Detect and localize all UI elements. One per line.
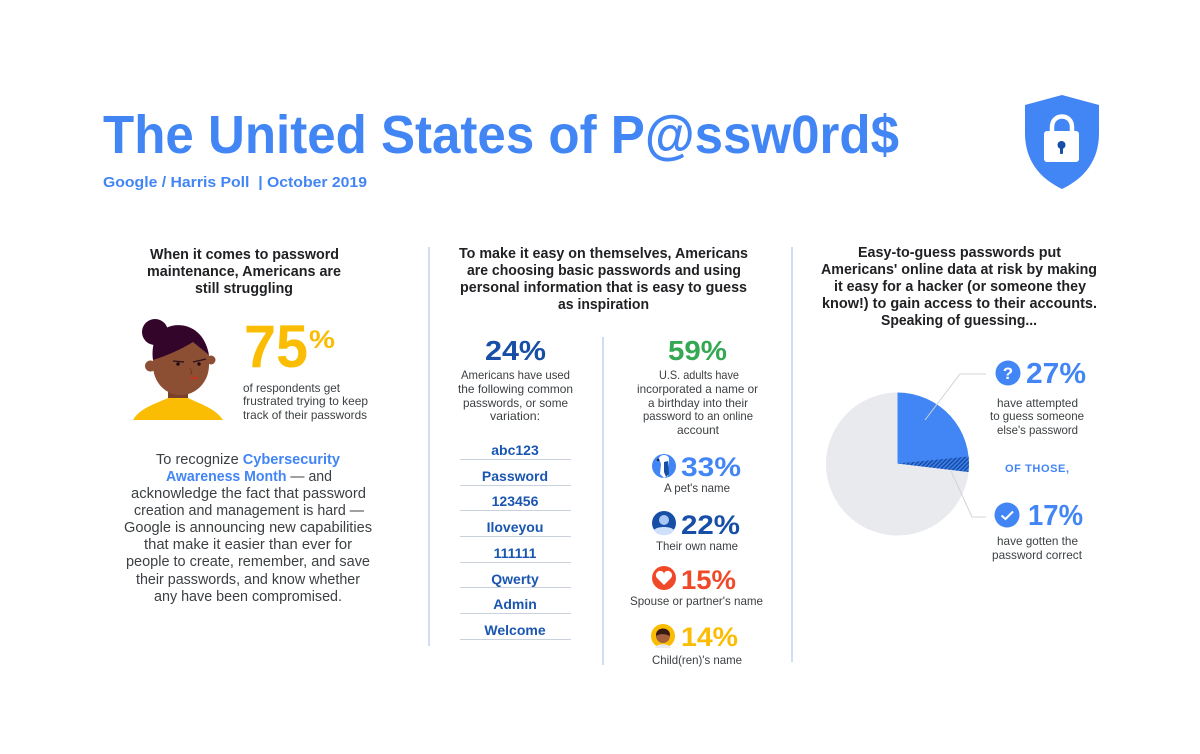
list: common passwords: Admin [493,596,537,612]
stat: own name 22 percent: 22% [681,510,740,540]
text: name or birthday: password to an online [643,409,753,423]
stat: 24 percent: 24% [485,335,546,366]
text: Cybersecurity Awareness Month paragraph: their passwords, and know whether [136,572,360,588]
stat: pet's name 33 percent: A pet's name [664,481,730,495]
callout line: to 27 percent [925,374,986,420]
list: common passwords: Password [482,468,548,484]
text: Cybersecurity Awareness Month paragraph: To recognize Cybersecurity [156,452,340,468]
list: common passwords [460,442,571,640]
text: Cybersecurity Awareness Month paragraph [124,452,372,605]
stat: 75 percent: 75 [244,313,308,380]
list: common passwords: Qwerty [491,571,539,587]
list: common passwords: Iloveyou [487,519,543,535]
heading: maintenance: When it comes to password [150,247,339,263]
heading: basic passwords: personal information that is easy to guess [460,280,747,296]
stat: 17 percent: 17% [1028,500,1083,532]
stat: partner's name 15 percent [630,565,763,608]
stat: pet's name 33 percent [652,452,741,495]
stat: children's name 14 percent [651,622,742,667]
icon: child [651,624,675,648]
text: common passwords intro: passwords, or some [463,396,568,410]
text: attempted to guess: to guess someone [990,409,1084,423]
stat: 27 percent: 27% [1026,358,1086,390]
heading: data at risk: it easy for a hacker (or someone they [834,279,1086,295]
text: attempted to guess: have attempted [997,396,1078,410]
stat: 59 percent: 59% [668,335,727,366]
callout line: to 17 percent [951,471,986,517]
text: gotten it correct: have gotten the [997,534,1078,548]
text: gotten it correct [992,534,1083,562]
text: gotten it correct: password correct [992,548,1083,562]
icon: person [652,511,676,535]
stat: children's name 14 percent: Child(ren)'s name [652,653,742,667]
heading: data at risk: Easy-to-guess passwords put [858,245,1061,261]
heading: basic passwords [459,246,748,313]
heading: data at risk: know!) to gain access to their accounts. [822,296,1097,312]
pie chart: 27 percent guessed, 17 percent correct [826,392,969,536]
stat: own name 22 percent [652,510,740,553]
panel: basic passwords [458,246,763,667]
text: common passwords intro [458,368,573,423]
stat: pet's name 33 percent: 33% [681,452,741,482]
heading: basic passwords: as inspiration [558,297,649,313]
list: common passwords: 123456 [492,493,539,509]
icon: question mark: ? [1003,364,1013,383]
text: frustrated respondents: of respondents get [243,381,341,395]
icon: question mark [996,360,1020,386]
heading: data at risk: Americans' online data at risk by making [821,262,1097,278]
text: frustrated respondents: track of their passwords [243,408,367,422]
text: Cybersecurity Awareness Month paragraph: that make it easier than ever for [144,537,352,553]
stat: children's name 14 percent: 14% [681,622,738,652]
text: name or birthday [637,368,758,437]
text: Cybersecurity Awareness Month paragraph: Google is announcing new capabilities [124,520,372,536]
stat: own name 22 percent: Their own name [656,539,738,553]
heading: data at risk [821,245,1097,329]
text: Cybersecurity Awareness Month paragraph: acknowledge the fact that password [131,486,366,502]
text: name or birthday: a birthday into their [648,396,748,410]
text: attempted to guess [990,396,1084,437]
heading: maintenance: maintenance, Americans are [147,264,341,280]
icon: dog [652,454,676,478]
text: common passwords intro: variation: [490,409,540,423]
heading: basic passwords: To make it easy on themselves, Americans [459,246,748,262]
text: Cybersecurity Awareness Month paragraph: people to create, remember, and save [126,554,370,570]
heading: data at risk: Speaking of guessing... [881,313,1037,329]
subtitle: source and date: Google / Harris Poll | October 2019 [103,174,367,191]
icon: heart [652,566,676,590]
text: name or birthday: U.S. adults have [659,368,739,382]
list: common passwords: 111111 [494,545,537,561]
icon: shield with padlock [1025,95,1099,189]
stat: partner's name 15 percent: 15% [681,565,736,595]
label: of those: OF THOSE, [1005,463,1069,475]
panel: password maintenance [124,247,372,605]
icon: check mark [994,502,1020,528]
title: The United States of P@ssw0rd$ [103,105,899,165]
text: name or birthday: incorporated a name or [637,382,758,396]
illustration: frustrated woman [133,319,223,420]
text: Cybersecurity Awareness Month paragraph: any have been compromised. [154,589,342,605]
stat: 75 percent: % [309,326,335,354]
heading: maintenance [147,247,341,297]
text: common passwords intro: Americans have used [461,368,570,382]
text: name or birthday: account [677,423,720,437]
heading: maintenance: still struggling [195,281,293,297]
text: frustrated respondents [243,381,368,422]
stat: partner's name 15 percent: Spouse or partner's name [630,594,763,608]
text: Cybersecurity Awareness Month paragraph: creation and management is hard — [134,503,364,519]
heading: basic passwords: are choosing basic passwords and using [467,263,741,279]
text: Cybersecurity Awareness Month paragraph: Awareness Month — and [166,469,332,485]
list: common passwords: abc123 [491,442,539,458]
list: common passwords: Welcome [484,622,546,638]
panel: guessing passwords [821,245,1097,562]
text: frustrated respondents: frustrated trying to keep [243,394,368,408]
text: common passwords intro: the following common [458,382,573,396]
text: attempted to guess: else's password [997,423,1078,437]
